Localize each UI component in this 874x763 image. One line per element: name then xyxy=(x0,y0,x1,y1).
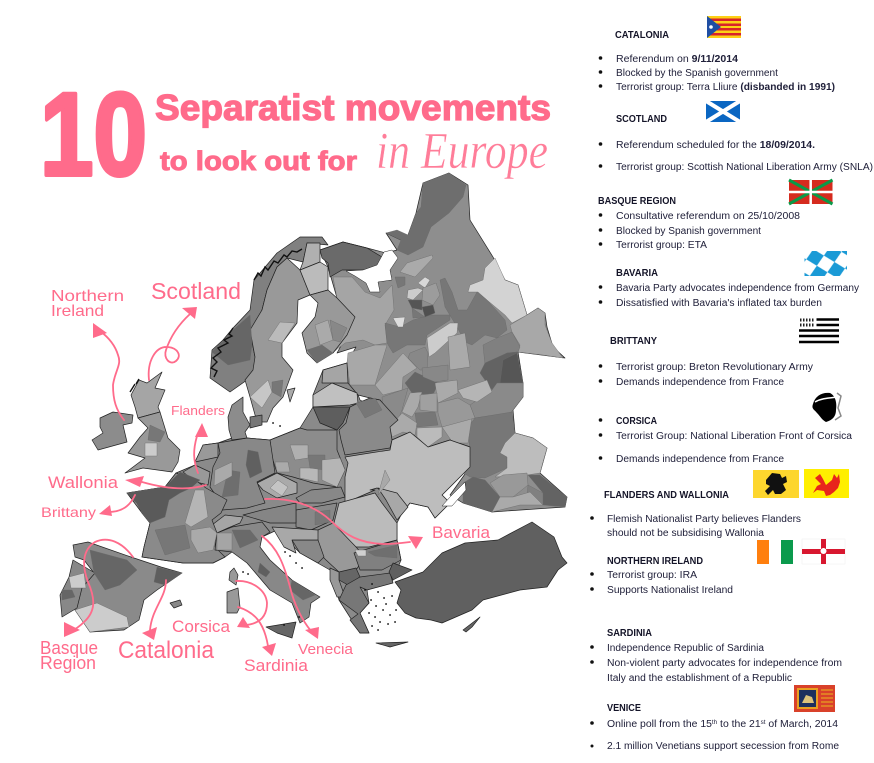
title xyxy=(40,69,551,201)
flag: basque xyxy=(789,180,832,204)
arrow: venecia xyxy=(262,536,319,639)
bullets: basque region: Terrorist group: ETA xyxy=(616,240,707,251)
bullets: catalonia: Blocked by the Spanish government xyxy=(616,68,778,79)
heading: flanders and wallonia: FLANDERS AND WALLONIA xyxy=(604,490,729,501)
bullets: brittany: Demands independence from France xyxy=(616,377,784,388)
arrow: wallonia xyxy=(125,476,206,488)
section: bavaria xyxy=(599,251,859,309)
bullets: scotland: Terrorist group: Scottish National Liberation Army (SNLA) xyxy=(616,162,873,173)
map labels xyxy=(40,278,491,675)
arrow: scotland xyxy=(149,307,197,380)
label: northern ireland: Northern xyxy=(51,288,124,305)
section: brittany xyxy=(599,318,839,388)
label: basque region: Basque xyxy=(40,638,98,658)
flag: corsica moor head xyxy=(812,393,841,422)
russia regions xyxy=(330,173,567,512)
bullets: venice: 2.1 million Venetians support secession from Rome xyxy=(607,741,839,752)
arrow: bavaria xyxy=(265,499,423,549)
flag: bavaria xyxy=(804,251,847,276)
label: flanders: Flanders xyxy=(171,403,226,418)
bullets: sardinia: Italy and the establishment of a Republic xyxy=(607,673,792,684)
label: sardinia: Sardinia xyxy=(244,656,309,675)
bullets: sardinia xyxy=(590,643,842,684)
bullets: catalonia: Terrorist group: Terra Lliure (disbanded in 1991) xyxy=(616,82,835,93)
heading: basque region: BASQUE REGION xyxy=(598,196,676,207)
bullets: corsica: Terrorist Group: National Liberation Front of Corsica xyxy=(616,431,852,442)
label: brittany: Brittany xyxy=(41,504,96,520)
bullets: venice: to the 21 xyxy=(717,719,761,730)
scandinavia regions xyxy=(212,315,347,408)
bullets: flanders and wallonia xyxy=(590,514,801,539)
label: basque region: Region xyxy=(40,653,96,673)
arrow: corsica xyxy=(236,581,267,628)
section: catalonia xyxy=(599,16,835,93)
arrow: catalonia xyxy=(142,580,166,640)
bullets: basque region: Blocked by Spanish government xyxy=(616,226,761,237)
label: scotland: Scotland xyxy=(151,278,241,304)
bullets: sardinia: Independence Republic of Sardinia xyxy=(607,643,764,654)
bullets: basque region xyxy=(599,211,800,251)
eastern europe regions xyxy=(270,398,397,558)
arrow: flanders xyxy=(194,423,208,473)
bullets: northern ireland: Supports Nationalist Ireland xyxy=(607,585,733,596)
bullets: venice: of March, 2014 xyxy=(766,719,838,730)
heading: northern ireland: NORTHERN IRELAND xyxy=(607,556,703,567)
bullets: catalonia xyxy=(599,54,835,93)
heading: sardinia: SARDINIA xyxy=(607,628,652,639)
arrows xyxy=(64,307,423,656)
arrow: basque region xyxy=(64,540,133,637)
arrow: northern ireland xyxy=(93,323,124,420)
heading: scotland: SCOTLAND xyxy=(616,114,667,125)
flag: northern ireland xyxy=(802,539,845,564)
heading: catalonia: CATALONIA xyxy=(615,30,669,41)
flag: venice xyxy=(794,685,835,712)
jagged coast details xyxy=(130,249,396,630)
bullets: scotland xyxy=(599,140,873,173)
title numeral 10: 10 xyxy=(40,69,147,201)
bullets: corsica: Demands independence from France xyxy=(616,454,784,465)
label: venecia: Venecia xyxy=(298,641,354,658)
bullets: bavaria: Dissatisfied with Bavaria's inflated tax burden xyxy=(616,298,822,309)
flag: catalonia xyxy=(707,16,741,38)
bullets: bavaria xyxy=(599,283,859,309)
title line one: Separatist movements xyxy=(155,87,551,128)
arrow: sardinia xyxy=(238,607,276,656)
heading: corsica: CORSICA xyxy=(616,416,657,427)
russia xyxy=(320,173,567,512)
section: scotland xyxy=(599,101,873,173)
bullets: flanders and wallonia: should not be subsidising Wallonia xyxy=(607,528,764,539)
scandinavia xyxy=(210,237,382,422)
bullets: basque region: Consultative referendum on 25/10/2008 xyxy=(616,211,800,222)
flag: scotland xyxy=(706,101,740,122)
bullets: venice: st xyxy=(761,720,766,726)
section: corsica xyxy=(599,393,852,465)
bullets: brittany xyxy=(599,362,813,388)
bullets: corsica xyxy=(599,418,852,465)
label: northern ireland xyxy=(51,288,124,320)
section: sardinia xyxy=(590,628,842,684)
section: venice xyxy=(590,685,839,752)
bullets: venice: th xyxy=(712,720,717,726)
label: bavaria: Bavaria xyxy=(432,523,491,542)
title script in Europe: in Europe xyxy=(376,123,548,180)
panel: movement details xyxy=(590,16,873,752)
baltic states and eastern europe xyxy=(243,363,470,633)
continental base xyxy=(127,363,470,633)
section: flanders and wallonia xyxy=(590,469,849,539)
white sea and azov sea xyxy=(346,250,466,506)
label: wallonia: Wallonia xyxy=(48,473,119,492)
arrow: brittany xyxy=(99,495,135,516)
bullets: sardinia: Non-violent party advocates for independence from xyxy=(607,658,842,669)
flag: brittany xyxy=(799,318,839,344)
label: corsica: Corsica xyxy=(172,617,231,636)
bullets: northern ireland: Terrorist group: IRA xyxy=(607,570,697,581)
bullets: scotland: Referendum scheduled for the 18/09/2014. xyxy=(616,140,815,151)
label: northern ireland: Ireland xyxy=(51,303,104,320)
label: catalonia: Catalonia xyxy=(118,637,215,664)
bullets: venice: Online poll from the 15 xyxy=(607,719,708,730)
map of Europe xyxy=(40,173,567,675)
section: northern ireland xyxy=(590,539,845,596)
flag: ireland xyxy=(757,540,793,564)
bullets: catalonia: Referendum on 9/11/2014 xyxy=(616,54,738,65)
heading: brittany: BRITTANY xyxy=(610,336,657,347)
bullets: brittany: Terrorist group: Breton Revolutionary Army xyxy=(616,362,813,373)
section: basque region xyxy=(598,180,832,251)
bullets: northern ireland xyxy=(590,570,733,596)
label: basque region xyxy=(40,638,98,673)
bullets: venice xyxy=(590,719,839,752)
western europe regions xyxy=(62,425,315,632)
title line two: to look out for xyxy=(160,146,358,176)
bullets: bavaria: Bavaria Party advocates independence from Germany xyxy=(616,283,859,294)
flag: flanders lion xyxy=(753,470,799,498)
heading: venice: VENICE xyxy=(607,703,641,714)
heading: bavaria: BAVARIA xyxy=(616,268,658,279)
western europe xyxy=(60,372,567,647)
flag: wallonia rooster xyxy=(804,469,849,498)
bullets: flanders and wallonia: Flemish Nationalist Party believes Flanders xyxy=(607,514,801,525)
